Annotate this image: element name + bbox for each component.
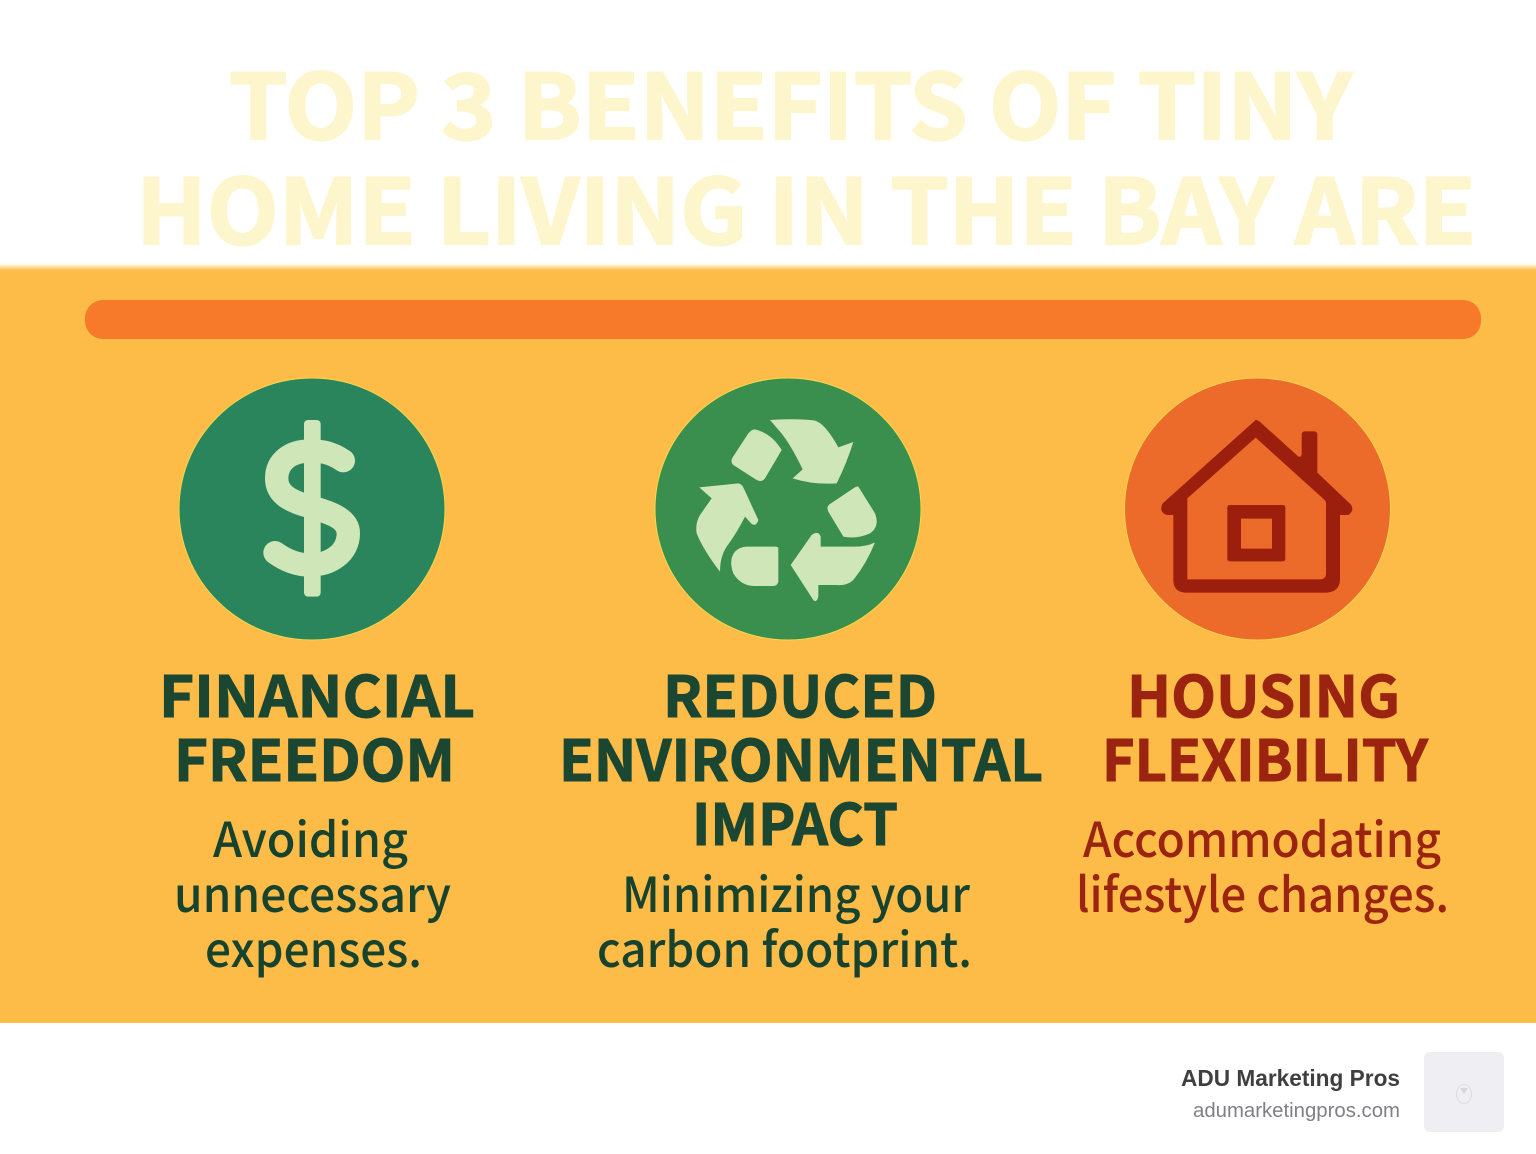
heading: reduced environmental impact: IMPACT (692, 780, 898, 862)
heading: housing flexibility: HOUSING (1127, 652, 1400, 734)
footer website: adumarketingpros.com (1193, 1100, 1400, 1122)
text: financial description: expenses. (205, 911, 422, 981)
heading: financial freedom: FINANCIAL (159, 652, 475, 734)
text: environmental description (597, 856, 972, 981)
icon: dollar sign (179, 378, 445, 640)
icon: house (1124, 378, 1390, 640)
footer logo placeholder (1424, 1052, 1504, 1132)
text: environmental description: Minimizing your (622, 856, 970, 926)
heading: housing flexibility (1102, 652, 1429, 798)
heading: reduced environmental impact: ENVIRONMENTAL (559, 716, 1043, 798)
text: financial description: Avoiding (213, 801, 408, 871)
column: housing flexibility (1076, 652, 1449, 926)
title (136, 35, 1476, 270)
text: housing description (1076, 801, 1449, 926)
footer background (0, 1023, 1536, 1154)
text: financial description: unnecessary (174, 856, 451, 926)
text: financial description (174, 801, 451, 981)
icon: recycle (655, 378, 921, 640)
title: TOP 3 BENEFITS OF TINY (229, 35, 1353, 165)
heading: financial freedom (159, 652, 475, 798)
orange header bar (85, 300, 1481, 339)
heading: reduced environmental impact (559, 652, 1043, 862)
text: housing description: lifestyle changes. (1076, 856, 1449, 926)
heading: financial freedom: FREEDOM (174, 716, 455, 798)
heading: housing flexibility: FLEXIBILITY (1102, 716, 1429, 798)
heading: reduced environmental impact: REDUCED (663, 652, 937, 734)
panel: orange background (0, 267, 1536, 1037)
column: reduced environmental impact (559, 652, 1043, 981)
text: environmental description: carbon footprint. (597, 911, 972, 981)
title: HOME LIVING IN THE BAY ARE (136, 140, 1476, 270)
footer brand name: ADU Marketing Pros (1181, 1065, 1400, 1091)
text: housing description: Accommodating (1083, 801, 1441, 871)
column: financial freedom (159, 652, 475, 981)
